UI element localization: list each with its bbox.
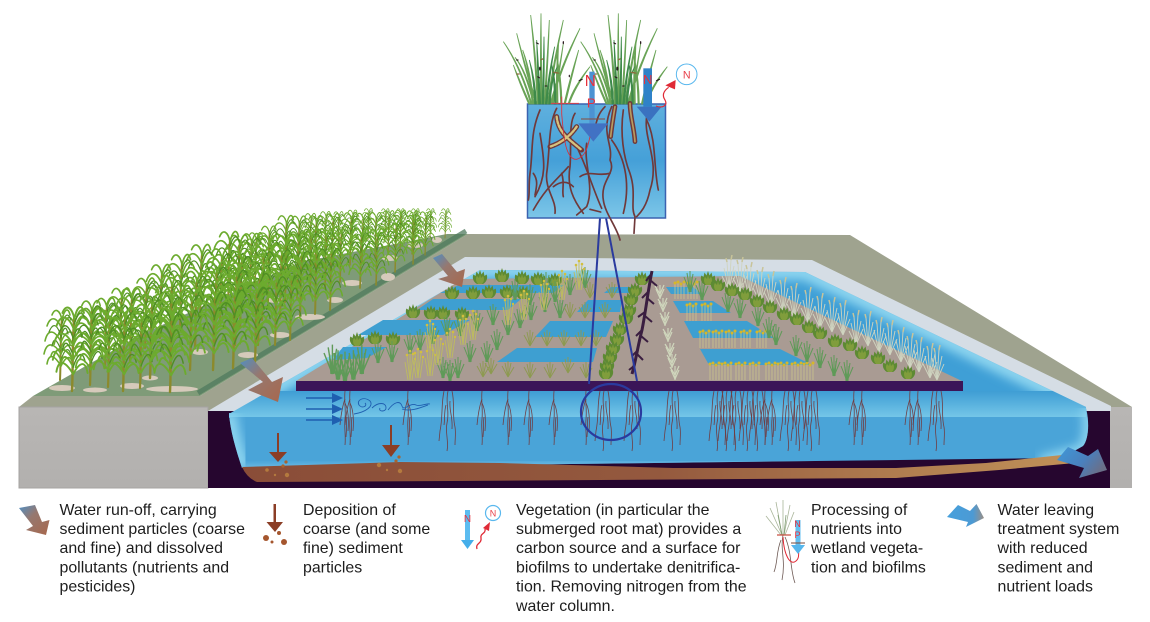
right diagonal bushes	[701, 271, 915, 379]
inset nitrogen arrow: N	[643, 72, 652, 87]
olive reeds near the front	[477, 282, 618, 378]
icon: plant processing: P	[794, 530, 801, 540]
inset nitrogen arrow	[637, 68, 662, 122]
legend: deposition	[263, 502, 430, 576]
icon: deposition arrow	[263, 504, 287, 545]
sediment layer	[242, 455, 1075, 482]
inset nutrient arrow N and P	[578, 72, 608, 142]
runoff arrow lower	[240, 358, 283, 402]
pond body	[208, 270, 1110, 488]
inset denitrification squiggle	[656, 80, 676, 107]
open water channels in the mat	[333, 285, 812, 365]
legend text 3: biofilms to undertake denitrifica-	[516, 559, 740, 576]
legend text 1: Water run-off, carrying	[60, 502, 217, 519]
magnifier circle	[581, 384, 641, 440]
legend text 3: tion. Removing nitrogen from the	[516, 579, 747, 596]
berm top surface	[19, 234, 1132, 411]
icon: plant processing: N	[794, 519, 801, 529]
legend text 3: submerged root mat) provides a	[516, 521, 741, 538]
inflow arrows	[306, 393, 343, 425]
legend: denitrification	[461, 502, 747, 615]
dark liner front	[208, 411, 1110, 488]
crop field	[33, 208, 468, 396]
inset N2 circle: N	[683, 69, 691, 81]
inset N2 circle	[676, 64, 697, 85]
field ground	[33, 234, 468, 396]
legend text 5: treatment system	[998, 521, 1119, 538]
legend text 2: particles	[303, 559, 362, 576]
green reeds right side	[684, 271, 853, 381]
legend text 4: nutrients into	[811, 521, 902, 538]
legend text 3: carbon source and a surface for	[516, 540, 741, 557]
legend text 3: Vegetation (in particular the	[516, 502, 710, 519]
water surface	[229, 270, 1086, 418]
legend text 1: pollutants (nutrients and	[60, 559, 229, 576]
icon: denitrification: N	[490, 508, 496, 518]
outflow arrow	[1057, 447, 1107, 478]
inset detail	[503, 13, 697, 240]
legend text 4: tion and biofilms	[811, 559, 926, 576]
legend text 5: nutrient loads	[998, 579, 1093, 596]
legend text 5: sediment and	[998, 559, 1093, 576]
inset uptake lines	[551, 97, 605, 159]
inset thick pale roots	[550, 103, 635, 150]
large front-left reeds	[324, 345, 370, 381]
icon: plant processing	[766, 500, 805, 583]
left ground block	[19, 407, 208, 488]
inset grass tufts	[503, 13, 667, 104]
floating mat edge	[296, 381, 963, 391]
icon: outflow arrow	[947, 504, 984, 527]
icon: runoff arrow	[19, 505, 50, 535]
legend text 1: pesticides)	[60, 579, 135, 596]
yellow flowers on water	[674, 280, 814, 380]
legend text 3: water column.	[515, 598, 615, 615]
legend text 2: fine) sediment	[303, 540, 403, 557]
rear bushes	[350, 268, 562, 346]
legend text 2: coarse (and some	[303, 521, 430, 538]
legend text 1: sediment particles (coarse	[60, 521, 245, 538]
inset roots	[528, 107, 658, 240]
floating mat surface	[296, 276, 962, 381]
white reeds on right margin	[722, 255, 944, 380]
legend: outflow	[947, 502, 1119, 596]
pale soil patches	[49, 237, 442, 392]
legend: runoff	[19, 502, 245, 596]
legend text 5: Water leaving	[998, 502, 1094, 519]
legend text 2: Deposition of	[303, 502, 396, 519]
legend text 4: wetland vegeta-	[810, 540, 923, 557]
icon: denitrification: N	[464, 514, 471, 525]
legend: processing	[766, 500, 926, 583]
legend text 4: Processing of	[811, 502, 908, 519]
dark purple plant column	[629, 271, 657, 374]
inset nutrient arrow N and P: P	[587, 95, 596, 110]
central column of bushes	[599, 271, 649, 379]
inset water box	[528, 104, 666, 218]
corn plants	[44, 208, 452, 392]
pale inner lining of the pond	[208, 257, 1111, 411]
turbulence swirl	[354, 399, 430, 414]
legend text 5: with reduced	[996, 540, 1088, 557]
yellow flowering reeds	[405, 260, 585, 380]
white plant column	[655, 285, 679, 380]
wetland plants on the mat	[324, 255, 944, 381]
magnifier lines to inset	[589, 218, 637, 384]
icon: denitrification	[461, 506, 500, 549]
roots under the mat	[340, 391, 944, 451]
right ground block	[1110, 407, 1132, 488]
inset: close-up of plants and roots	[503, 13, 697, 240]
sediment deposition arrow left	[265, 433, 289, 477]
green reeds	[372, 267, 591, 381]
inset nutrient arrow N and P: N	[585, 73, 596, 90]
water front section	[229, 408, 1088, 468]
runoff arrow upper	[433, 254, 465, 287]
sediment deposition arrow right	[377, 425, 402, 473]
legend text 1: and fine) and dissolved	[60, 540, 223, 557]
